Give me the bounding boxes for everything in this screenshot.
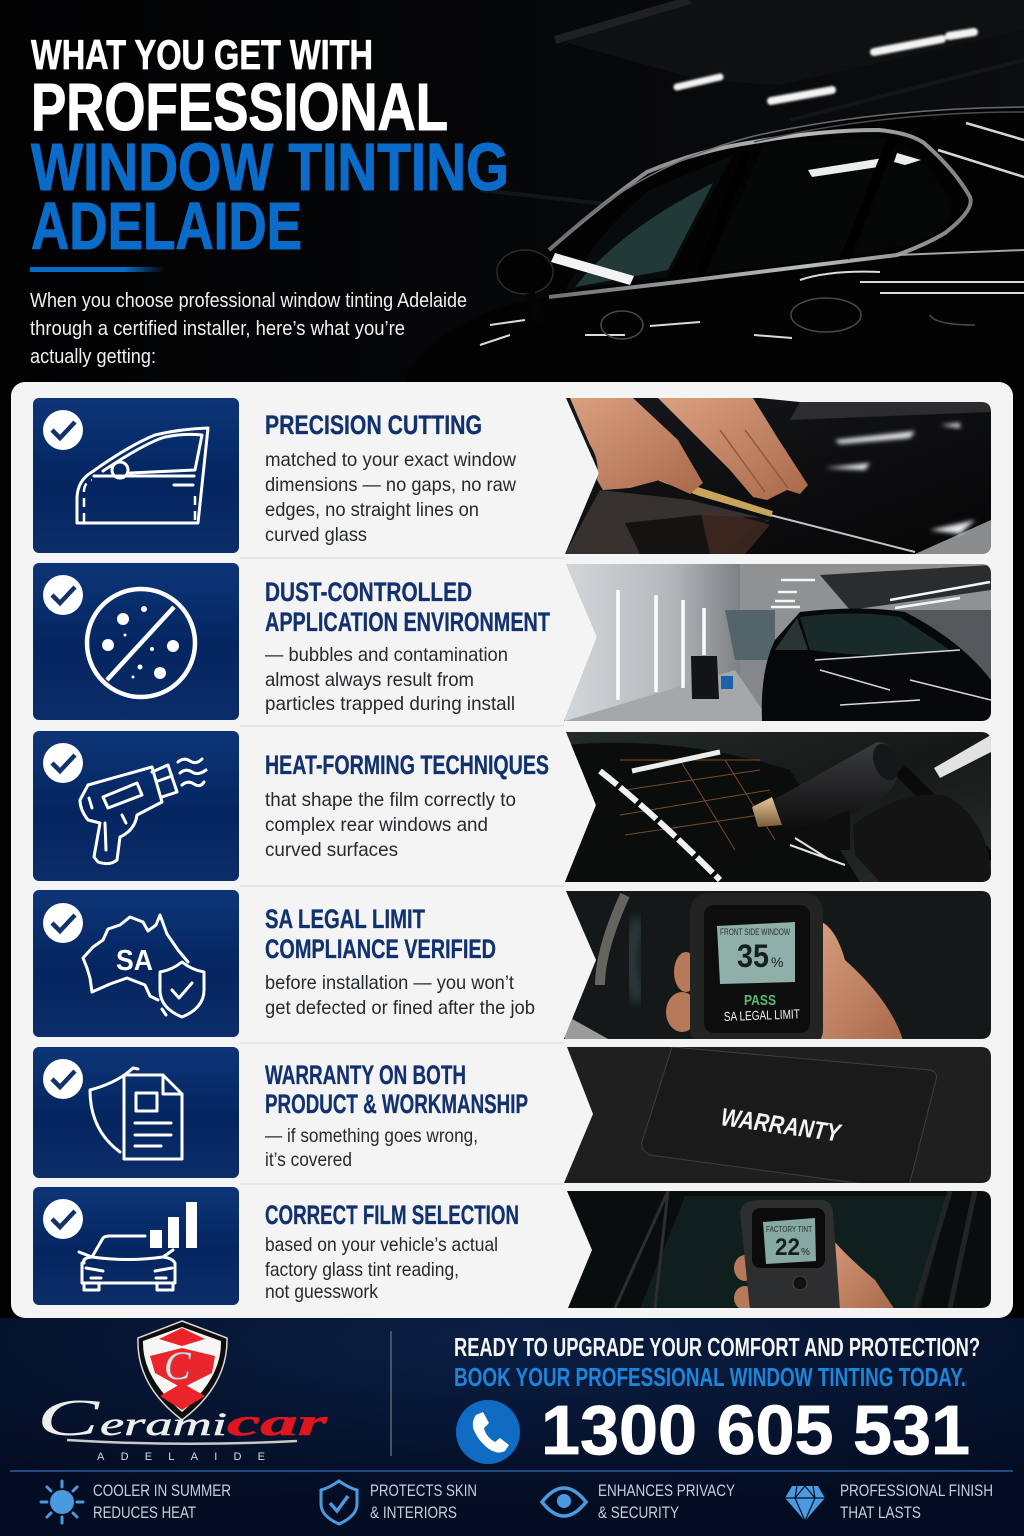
body text: — bubbles and contamination (265, 644, 508, 666)
body text: almost always result from (265, 669, 474, 691)
wordmark: C (37, 1390, 101, 1447)
wordmark: erami (100, 1407, 227, 1443)
row 2: dust-controlled application (33, 563, 995, 724)
heading (265, 904, 496, 964)
body text (265, 1234, 498, 1303)
photo: tint meter reading 35%: SA LEGAL LIMIT (724, 1006, 800, 1024)
icon: no dust particles (33, 563, 239, 720)
row 6: correct film selection (33, 1187, 995, 1311)
benefit: cooler in summer: COOLER IN SUMMER (93, 1481, 231, 1500)
heading: APPLICATION ENVIRONMENT (265, 607, 550, 637)
title: PROFESSIONAL (31, 70, 448, 145)
heading: DUST-CONTROLLED (265, 577, 472, 607)
benefit: cooler in summer: REDUCES HEAT (93, 1503, 196, 1522)
icon: car door (33, 398, 239, 553)
icon: phone (456, 1400, 520, 1464)
call to action (454, 1332, 980, 1392)
body text (265, 1125, 478, 1171)
body text: curved surfaces (265, 839, 398, 861)
icon: sun (41, 1481, 83, 1523)
panel: benefits list (11, 382, 1013, 1318)
logo: ceramicar adelaide (37, 1321, 329, 1463)
body text: based on your vehicle’s actual (265, 1234, 498, 1256)
intro text: through a certified installer, here’s what you’re (30, 317, 405, 340)
location label: ADELAIDE (97, 1451, 265, 1463)
heading: COMPLIANCE VERIFIED (265, 934, 496, 964)
photo: clean bay with car (560, 564, 995, 724)
body text: dimensions — no gaps, no raw (265, 474, 517, 496)
photo: heat gun on rear window (560, 732, 995, 887)
footer rule (10, 1470, 1013, 1472)
photo: tint meter reading 35%: % (771, 954, 783, 970)
heading: CORRECT FILM SELECTION (265, 1200, 519, 1230)
icon: australia map with shield (33, 890, 239, 1037)
body text (265, 789, 516, 861)
wordmark (37, 1390, 329, 1447)
body text: — if something goes wrong, (265, 1125, 478, 1147)
title: ADELAIDE (31, 189, 302, 264)
benefit: protects skin: & INTERIORS (370, 1503, 457, 1522)
body text: matched to your exact window (265, 449, 517, 471)
body text: factory glass tint reading, (265, 1259, 459, 1281)
icon: shield crest (138, 1321, 227, 1420)
body text (265, 449, 517, 546)
body text: it’s covered (265, 1149, 352, 1171)
benefit: cooler in summer (41, 1481, 231, 1523)
body text: not guesswork (265, 1281, 378, 1303)
benefit: enhances privacy: & SECURITY (598, 1503, 679, 1522)
icon: australia map with shield: SA (116, 945, 153, 977)
icon: shield crest: C (164, 1343, 192, 1388)
benefit: professional finish (785, 1481, 993, 1522)
intro text: actually getting: (30, 345, 156, 368)
photo: tint meter reading 35%: PASS (744, 992, 776, 1009)
heading (265, 1060, 528, 1119)
body text (265, 644, 515, 715)
row 4: SA legal limit (33, 890, 995, 1048)
icon: warranty document and shield (33, 1047, 239, 1178)
benefit: protects skin: PROTECTS SKIN (370, 1481, 477, 1500)
benefit: professional finish: THAT LASTS (840, 1503, 921, 1522)
icon: diamond (785, 1486, 825, 1521)
photo: tint meter reading 22%: % (801, 1247, 810, 1258)
heading: PRECISION CUTTING (265, 410, 482, 440)
photo: tint meter reading 22%: FACTORY TINT (766, 1224, 812, 1234)
photo: tint meter reading 22% (560, 1191, 995, 1311)
body text: before installation — you won’t (265, 972, 515, 994)
title underline (30, 267, 165, 272)
heading: WARRANTY ON BOTH (265, 1060, 466, 1090)
photo: tint meter reading 35% (560, 891, 995, 1048)
heading: SA LEGAL LIMIT (265, 904, 425, 934)
photo: tint meter reading 35%: 35 (737, 938, 769, 974)
intro text (30, 289, 467, 368)
heading: PRODUCT & WORKMANSHIP (265, 1089, 528, 1119)
phone number: 1300 605 531 (541, 1391, 970, 1469)
body text (265, 972, 535, 1019)
wordmark: car (227, 1402, 329, 1444)
body text: that shape the film correctly to (265, 789, 516, 811)
benefit: enhances privacy: ENHANCES PRIVACY (598, 1481, 735, 1500)
heading (265, 577, 550, 637)
hero: garage and car photo (0, 0, 1024, 385)
body text: edges, no straight lines on (265, 499, 479, 521)
icon: car with signal bars (33, 1187, 239, 1305)
divider (390, 1331, 392, 1456)
photo: warranty card: WARRANTY (719, 1103, 844, 1148)
body text: particles trapped during install (265, 693, 515, 715)
heading: HEAT-FORMING TECHNIQUES (265, 750, 549, 780)
row 1: precision cutting (33, 398, 995, 558)
benefit: enhances privacy (542, 1481, 735, 1522)
row 3: heat-forming techniques (33, 731, 995, 887)
intro text: When you choose professional window tinting Adelaide (30, 289, 467, 312)
title: WHAT YOU GET WITH (31, 31, 373, 78)
title: WINDOW TINTING (31, 130, 509, 205)
row 5: warranty (33, 1047, 995, 1190)
photo: tint meter reading 22%: 22 (775, 1234, 800, 1261)
icon: eye (542, 1488, 586, 1516)
icon: heat gun (33, 731, 239, 881)
benefit: protects skin (321, 1481, 477, 1524)
photo: cutting tint film (560, 398, 995, 558)
title (31, 31, 509, 264)
icon: shield (321, 1481, 357, 1524)
photo: warranty card (560, 1047, 995, 1190)
photo: tint meter reading 35%: FRONT SIDE WINDOW (720, 927, 790, 937)
body text: complex rear windows and (265, 814, 488, 836)
body text: curved glass (265, 524, 367, 546)
footer background (0, 1318, 1024, 1536)
body text: get defected or fined after the job (265, 997, 535, 1019)
